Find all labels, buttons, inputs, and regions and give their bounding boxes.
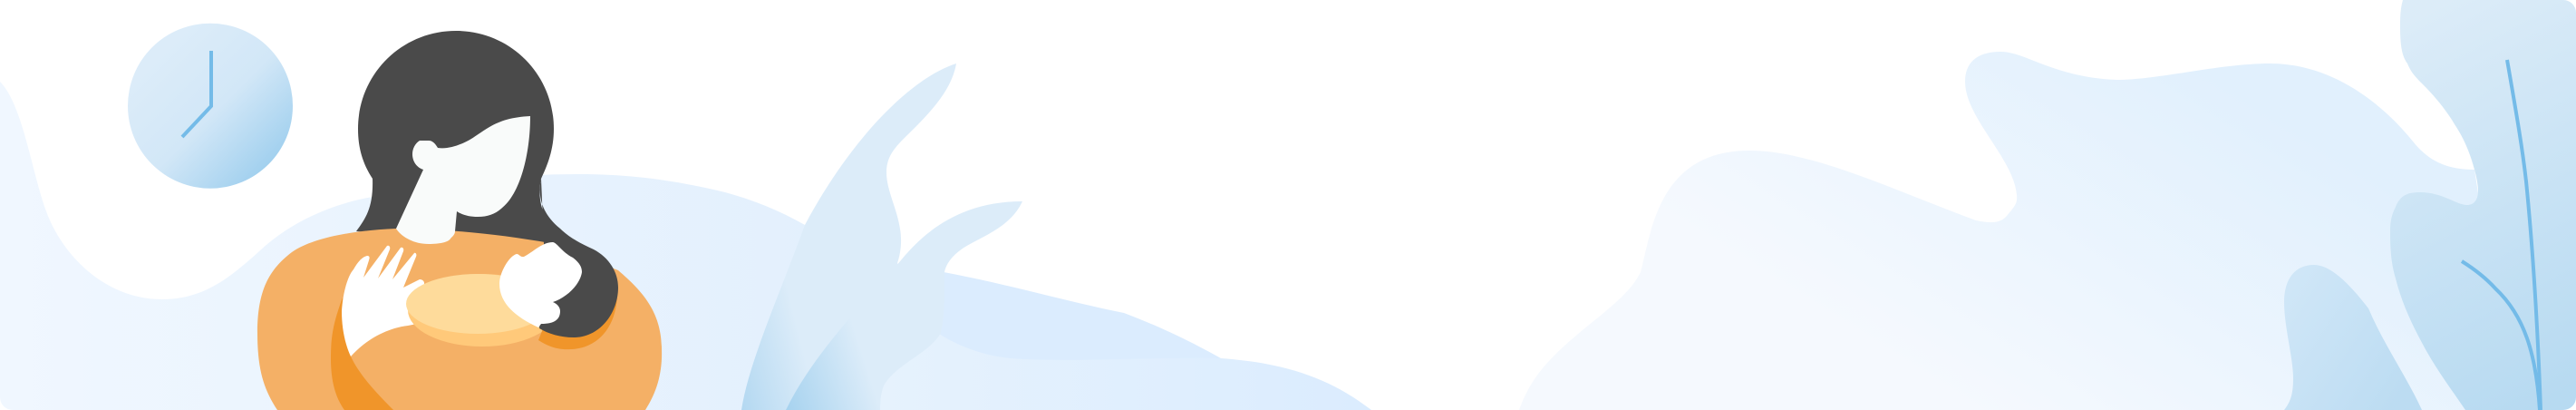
clock face [128, 24, 293, 189]
hair shadow on sleeve [538, 295, 617, 349]
right small leaf [2284, 265, 2422, 410]
background blob: centre lower wave [880, 335, 1371, 410]
hair [356, 31, 554, 245]
clock hands [182, 51, 211, 137]
clock [128, 24, 293, 189]
background blob: centre wave [896, 263, 1221, 360]
hair over shoulder [539, 179, 618, 337]
plant stem, branch [2462, 261, 2540, 410]
left hand [342, 246, 426, 356]
face and neck [396, 116, 530, 244]
large leaf, centre [741, 63, 1022, 410]
inner leaf shading [786, 330, 867, 410]
background blob: left wave [0, 82, 870, 410]
belly lighter ellipse [406, 274, 531, 334]
torso [257, 229, 662, 410]
belly darker ellipse [408, 274, 557, 347]
plant stem, tall [2507, 60, 2541, 410]
background blob: right large [1519, 52, 2478, 410]
right hand [499, 242, 582, 327]
sleeve shadow [331, 298, 393, 410]
right large leaf [2390, 0, 2576, 410]
woman figure [257, 31, 662, 410]
